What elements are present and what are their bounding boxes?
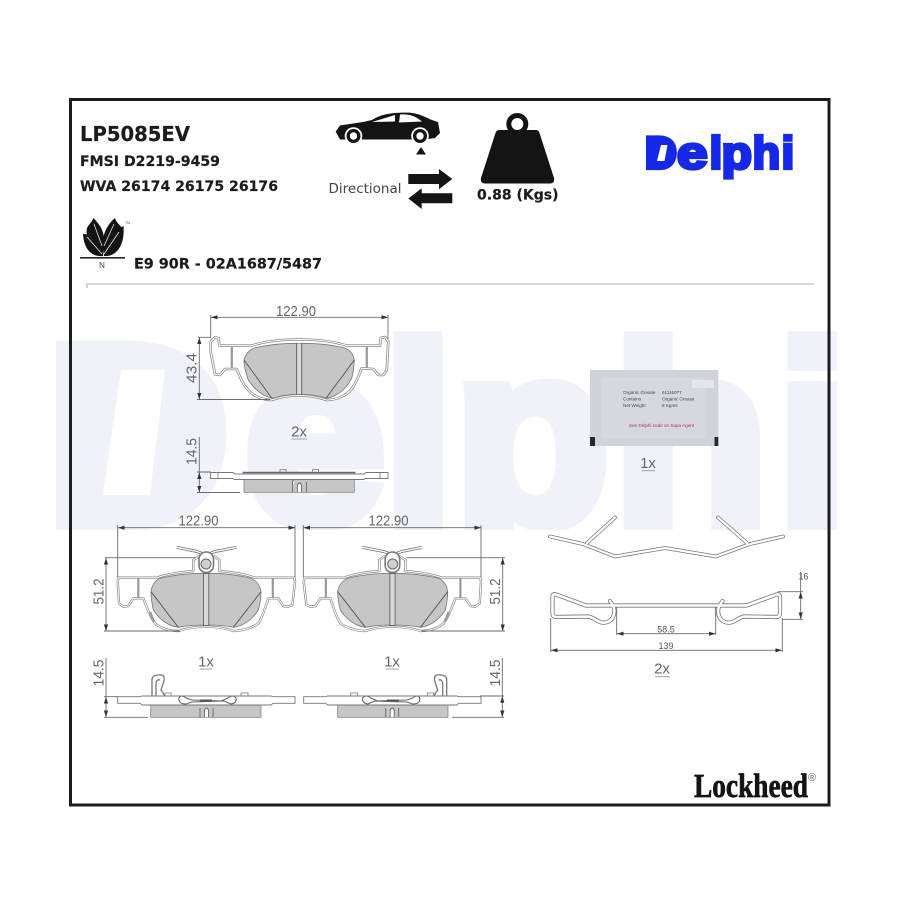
backing plate	[211, 337, 388, 400]
background watermark: Delphi: p	[454, 293, 610, 578]
background watermark: Delphi: i	[777, 293, 848, 578]
outer frame	[70, 100, 829, 805]
dimension: 122.90 top: 122.90	[276, 303, 316, 320]
background watermark: Delphi: e	[244, 293, 386, 578]
approval code: E9 90R - 02A1687/5487	[134, 256, 322, 272]
pad drawing: top view 2x	[211, 337, 388, 400]
Delphi logo	[645, 127, 794, 179]
icon: direction arrows	[408, 169, 452, 209]
weight value: 0.88 (Kgs)	[477, 188, 558, 204]
dimension: 14.5 right: 14.5	[487, 660, 504, 686]
Delphi logo: i	[782, 127, 794, 178]
dimension: 16	[778, 572, 809, 619]
FMSI reference: FMSI D2219-9459	[80, 154, 220, 170]
quantity: 2x top pad: 2x	[291, 424, 307, 440]
grease sachet: 61116077	[662, 390, 682, 395]
dimension: 122.90 left: 122.90	[178, 512, 218, 530]
Lockheed logo: Lockheed	[694, 768, 808, 805]
grease sachet: 8 Kgms	[662, 403, 678, 408]
divider	[87, 284, 814, 288]
background watermark: Delphi: D	[46, 293, 230, 578]
icon: leaf certification: N	[99, 261, 105, 270]
Delphi logo: h	[753, 127, 780, 178]
dimension: 14.5 top side view: 14.5	[184, 438, 200, 465]
quantity: 1x right: 1x	[384, 654, 400, 670]
dimension: 14.5 right	[452, 658, 504, 717]
icon: leaf certification: TM	[125, 221, 130, 225]
grease sachet: Net Weight	[623, 403, 646, 408]
background watermark: Delphi: l	[383, 293, 454, 578]
dimension: 139	[551, 618, 782, 652]
Delphi logo: D	[645, 127, 677, 178]
dimension: 122.90 right: 122.90	[368, 512, 408, 530]
spring clip	[177, 547, 237, 555]
friction material	[244, 343, 354, 398]
grease sachet: See Delphi code on Sapa Agent	[629, 423, 695, 428]
dimension: 51.2 left: 51.2	[90, 578, 108, 604]
icon: car with rear axle marker	[336, 113, 440, 154]
quantity: 1x left: 1x	[198, 654, 214, 670]
friction material	[151, 573, 261, 627]
icon: leaf certification	[80, 218, 130, 270]
WVA references: WVA 26174 26175 26176	[80, 179, 278, 195]
grease sachet: Contains	[623, 396, 642, 402]
dimension: 51.2 left	[90, 558, 195, 631]
dimension: 14.5 top side view	[184, 437, 240, 492]
dimension: 51.2 right: 51.2	[487, 578, 504, 604]
dimension: 122.90 left	[118, 512, 295, 577]
dimension: 139: 139	[658, 641, 674, 651]
dimension: 51.2 right	[407, 558, 505, 631]
pad drawing: front left with spring	[118, 547, 295, 631]
Delphi logo: l	[710, 127, 722, 178]
dimension: 122.90 right	[303, 512, 481, 577]
pad drawing: front right, mirrored	[304, 547, 481, 631]
directional label: Directional	[328, 182, 402, 197]
background watermark: Delphi	[56, 332, 837, 530]
quantity: 2x clip: 2x	[654, 660, 670, 678]
spring clip: side view	[550, 518, 783, 556]
dimension: 58.5	[617, 607, 716, 635]
pad drawing: side view right, mirrored	[304, 675, 481, 717]
quantity: 1x sachet: 1x	[640, 455, 656, 472]
pad drawing: side view left with clip	[118, 675, 295, 717]
dimension: 16: 16	[798, 572, 809, 582]
part number heading: LP5085EV	[80, 122, 190, 146]
Delphi logo: p	[722, 128, 752, 179]
dimension: 58.5: 58.5	[657, 624, 675, 634]
grease sachet	[590, 370, 718, 446]
dimension: 122.90 top	[211, 303, 388, 339]
pad drawing: side view	[210, 470, 388, 492]
Delphi logo: e	[677, 128, 708, 178]
Lockheed logo: ®	[808, 772, 816, 784]
dimension: 14.5 left	[90, 658, 148, 717]
dimension: 14.5 left: 14.5	[90, 660, 108, 686]
grease sachet: Organic Grease	[623, 390, 656, 395]
background watermark: Delphi: h	[613, 293, 769, 578]
dimension: 43.4	[184, 337, 270, 400]
icon: weight	[481, 116, 554, 184]
backing plate	[118, 557, 295, 631]
dimension: 43.4: 43.4	[184, 353, 200, 383]
grease sachet: Organic Grease	[662, 396, 695, 402]
spring clip: top view	[552, 594, 780, 623]
